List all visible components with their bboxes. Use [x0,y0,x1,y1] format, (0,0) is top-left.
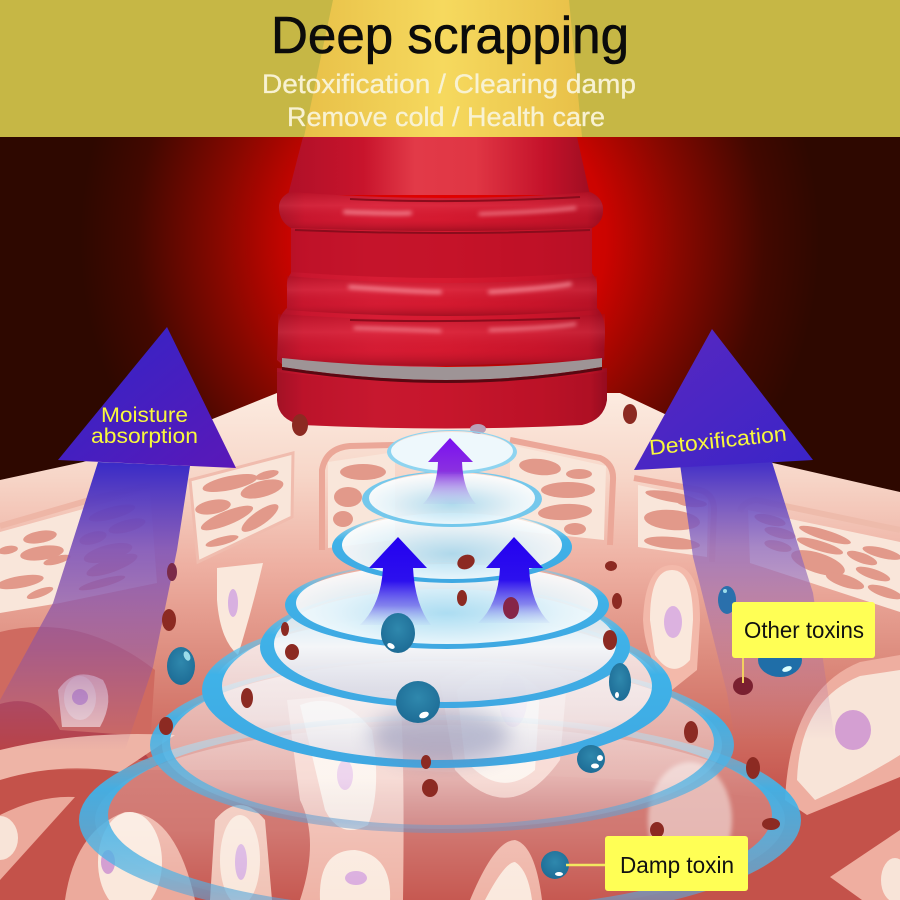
specular highlights [345,208,575,331]
subtitle [262,69,636,132]
cell: mid center right [440,660,567,798]
cell: inner left [217,563,263,655]
particle under applicator [470,424,486,434]
muscle block: center left [322,445,395,550]
muscle block: inner left [190,453,293,562]
bottom right cell edge [830,830,900,900]
muscle block: center right [510,440,613,545]
ring 7 large base [79,715,801,900]
base shading [277,372,607,428]
droplet [381,613,415,653]
pale lower left panel [0,797,75,880]
other toxins text: Other toxins [744,617,864,643]
lower red tissue [0,770,900,900]
damp toxin text: Damp toxin [620,852,734,878]
cell: right lower strip [648,762,732,878]
subtitle: Remove cold / Health care [287,102,605,132]
droplet [758,643,802,677]
skin tissue layer [0,393,900,900]
arrow: top purple [423,438,476,504]
ring 2 [332,511,572,583]
muscle block: far right [740,500,900,612]
cell: left [58,674,108,727]
callout: damp toxin [541,836,748,891]
light cone over band [304,0,582,137]
droplet [167,647,195,685]
label: moisture absorption [91,403,198,448]
droplet [718,586,736,614]
red toxin particles [159,404,780,838]
subtitle: Detoxification / Clearing damp [262,69,636,99]
cell: far left edge [0,816,18,860]
ring 3 [285,561,609,649]
cell: inner right [643,565,700,690]
red applicator head [277,137,607,428]
label: detoxification: Detoxification [648,422,788,460]
left arrow head [58,327,236,468]
muscle block: far left [0,485,157,613]
droplet [396,681,440,723]
arrow: blue left [360,537,431,625]
ring 1 [362,471,542,527]
center shadow [370,707,510,763]
dark red blob left [0,701,150,760]
second band shading [287,276,597,316]
small center arrows [360,438,550,625]
other toxins label box [732,602,875,658]
concentric ring vortex [79,430,801,900]
cell: bottom center [320,850,390,900]
cell: far right [785,655,900,815]
label: moisture absorption: Moisture [101,403,188,427]
body section shading [291,230,592,278]
upper ring shading [279,192,603,231]
ring 4 [260,586,630,708]
lower left dark lobe [0,627,155,760]
right large arrow: detoxification [634,329,835,740]
cell: bottom column left [210,805,272,900]
upper ring [279,192,603,231]
label: moisture absorption: absorption [91,424,198,448]
ring 6 [150,657,734,833]
left large arrow: moisture absorption [0,327,236,750]
third band shading [278,314,605,366]
callout: other toxins [732,602,875,695]
muscle block: inner right [634,478,714,562]
droplet [577,745,605,773]
cell: bottom right [470,840,542,900]
cell: lower left [65,812,195,900]
silver ring [282,358,602,380]
other toxins connector and particle [733,655,753,695]
ring 5 [202,612,672,768]
dark seam lines [295,197,590,321]
pale band left [0,734,175,780]
yellow top band [0,0,900,137]
groove under silver ring [282,367,602,383]
right arrow shaft [680,462,835,740]
base [277,368,607,428]
droplet [609,663,631,701]
ring 0 [387,430,517,474]
cell: center left column [287,690,404,900]
arrow: blue right [478,537,550,623]
right arrow head [634,329,813,470]
applicator neck [288,137,590,195]
damp toxin droplet and connector [541,851,606,879]
blue damp toxin droplets [167,586,802,773]
lower body section [277,225,605,372]
title: Deep scrapping [271,7,629,65]
left arrow shaft [0,462,190,750]
damp toxin label box [605,836,748,891]
